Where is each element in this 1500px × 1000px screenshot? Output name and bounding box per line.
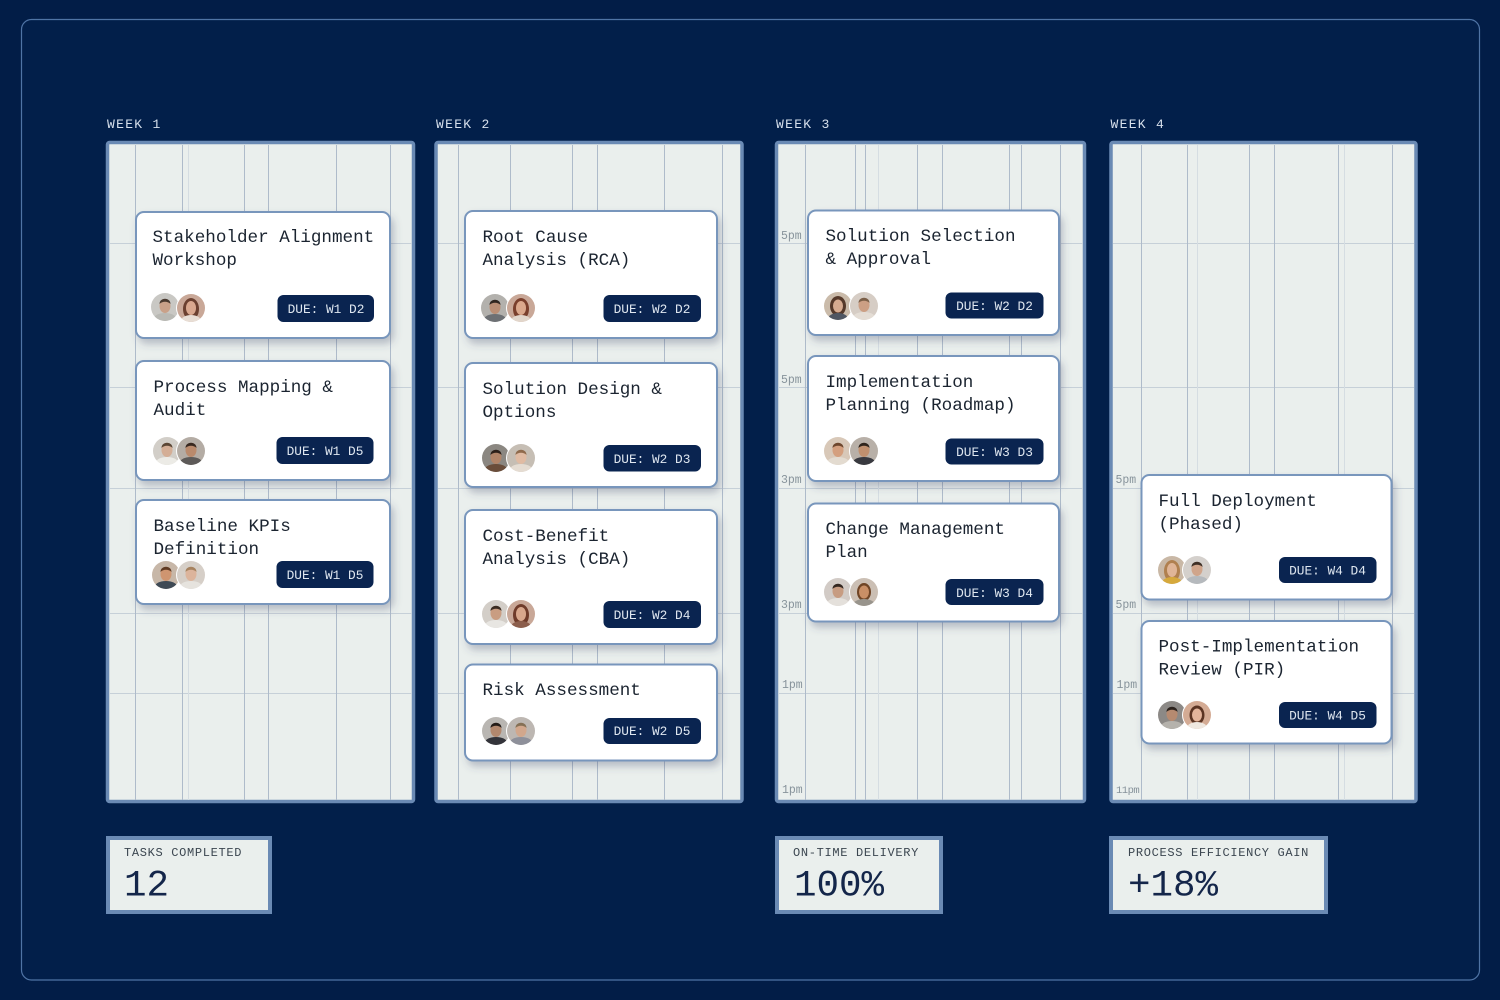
week 3 panel with grid — [776, 142, 1084, 802]
card: Solution Design & Options: Options — [482, 403, 556, 423]
time labels — [781, 230, 803, 797]
due badge — [946, 292, 1044, 318]
time labels: 5pm — [1116, 599, 1136, 612]
card: Risk Assessment: Risk Assessment — [482, 681, 641, 701]
time labels: 3pm — [781, 599, 802, 612]
card: Root Cause Analysis (RCA): Root Cause — [482, 228, 588, 248]
due badge — [278, 295, 374, 322]
card: Solution Selection & Approval — [808, 210, 1059, 335]
due badge: DUE: W2 D4 — [614, 608, 691, 623]
time labels: 5pm — [781, 230, 802, 243]
time labels: 1pm — [782, 679, 803, 692]
card: Full Deployment (Phased): (Phased) — [1158, 515, 1243, 535]
week 4 label: WEEK 4 — [1110, 117, 1165, 132]
card: Process Mapping & Audit — [136, 361, 390, 480]
avatars — [1158, 701, 1211, 729]
card: Solution Selection & Approval: & Approval — [826, 250, 931, 270]
due badge — [946, 438, 1044, 464]
due badge — [1279, 702, 1376, 728]
week 3 label: WEEK 3 — [776, 117, 831, 132]
time labels: 11pm — [1116, 785, 1139, 797]
due badge — [604, 718, 701, 744]
column: week 3 — [776, 117, 1084, 802]
week 2 panel with grid — [436, 142, 742, 802]
card: Solution Design & Options: Solution Design & — [482, 380, 662, 400]
avatars — [151, 293, 205, 322]
due badge — [276, 561, 374, 588]
card: Baseline KPIs Definition: Baseline KPIs — [154, 517, 291, 537]
due badge — [604, 601, 701, 628]
due badge: DUE: W4 D5 — [1289, 708, 1366, 724]
column: week 4 — [1110, 117, 1416, 802]
card: Root Cause Analysis (RCA): Analysis (RCA) — [482, 251, 630, 271]
avatars — [152, 561, 205, 589]
card: Process Mapping & Audit: Process Mapping & — [154, 378, 333, 398]
due badge: DUE: W3 D3 — [956, 445, 1033, 460]
card: Process Mapping & Audit: Audit — [154, 401, 206, 421]
week 1 panel with grid — [108, 142, 414, 802]
due badge: DUE: W2 D3 — [614, 452, 690, 467]
due badge: DUE: W4 D4 — [1289, 564, 1366, 578]
time labels: 5pm — [781, 374, 802, 387]
stat: on-time delivery — [777, 838, 941, 912]
due badge: DUE: W2 D2 — [614, 302, 690, 317]
card: Root Cause Analysis (RCA) — [465, 211, 717, 338]
card: Cost-Benefit Analysis (CBA): Analysis (CBA) — [482, 550, 630, 570]
week 2 label: WEEK 2 — [436, 117, 491, 132]
avatars — [153, 437, 205, 465]
stat: tasks completed — [108, 838, 270, 912]
due badge — [1279, 557, 1376, 583]
due badge: DUE: W2 D2 — [956, 299, 1033, 314]
time labels: 5pm — [1116, 474, 1136, 487]
avatars — [482, 600, 535, 628]
time labels — [1116, 474, 1139, 797]
card: Cost-Benefit Analysis (CBA) — [465, 510, 717, 644]
stat: process efficiency gain — [1111, 838, 1326, 912]
due badge — [946, 579, 1044, 605]
due badge — [604, 445, 701, 472]
card: Stakeholder Alignment Workshop: Workshop — [152, 251, 237, 271]
avatars — [481, 294, 535, 322]
card: Stakeholder Alignment Workshop — [136, 212, 390, 338]
card: Solution Selection & Approval: Solution Selection — [826, 227, 1016, 247]
card: Change Management Plan: Plan — [826, 543, 868, 563]
due badge: DUE: W3 D4 — [956, 586, 1033, 601]
avatars — [824, 292, 878, 320]
due badge: DUE: W1 D5 — [287, 568, 363, 583]
card: Change Management Plan — [808, 504, 1059, 622]
card: Implementation Planning (Roadmap): Implementation — [826, 373, 973, 393]
stat: tasks completed: 12 — [124, 866, 169, 908]
card: Post-Implementation Review (PIR): Post-Implementation — [1158, 638, 1359, 658]
due badge — [276, 437, 374, 464]
stat: process efficiency gain: +18% — [1128, 866, 1219, 908]
column: week 2 — [436, 117, 742, 802]
card: Baseline KPIs Definition: Definition — [154, 540, 259, 560]
card: Full Deployment (Phased): Full Deployment — [1158, 492, 1317, 512]
stat: tasks completed: TASKS COMPLETED — [124, 846, 242, 860]
due badge — [604, 295, 701, 322]
avatars — [824, 578, 878, 606]
time labels: 3pm — [781, 474, 802, 487]
card: Implementation Planning (Roadmap) — [808, 356, 1059, 481]
column: week 1 — [107, 117, 414, 802]
card: Full Deployment (Phased) — [1142, 475, 1392, 600]
avatars — [482, 717, 535, 745]
time labels: 1pm — [1116, 679, 1137, 692]
week 4 panel with grid — [1111, 142, 1416, 802]
avatars — [482, 444, 535, 472]
due badge: DUE: W1 D2 — [288, 302, 364, 317]
card: Stakeholder Alignment Workshop: Stakeholder Alignment — [152, 228, 374, 248]
card: Post-Implementation Review (PIR): Review (PIR) — [1158, 660, 1285, 680]
card: Implementation Planning (Roadmap): Planning (Roadmap) — [826, 396, 1016, 416]
stat: process efficiency gain: PROCESS EFFICIENCY GAIN — [1128, 846, 1309, 860]
week 1 label: WEEK 1 — [107, 117, 162, 132]
card: Baseline KPIs Definition — [136, 500, 390, 604]
stat: on-time delivery: ON-TIME DELIVERY — [793, 846, 919, 860]
due badge: DUE: W2 D5 — [614, 724, 690, 739]
avatars — [1158, 556, 1211, 584]
card: Risk Assessment — [465, 664, 717, 760]
card: Cost-Benefit Analysis (CBA): Cost-Benefit — [482, 527, 609, 547]
avatars — [824, 437, 878, 465]
card: Change Management Plan: Change Management — [826, 520, 1005, 540]
due badge: DUE: W1 D5 — [287, 444, 363, 459]
card: Post-Implementation Review (PIR) — [1142, 621, 1392, 744]
card: Solution Design & Options — [465, 363, 717, 487]
stat: on-time delivery: 100% — [794, 866, 885, 908]
time labels: 1pm — [782, 784, 803, 797]
